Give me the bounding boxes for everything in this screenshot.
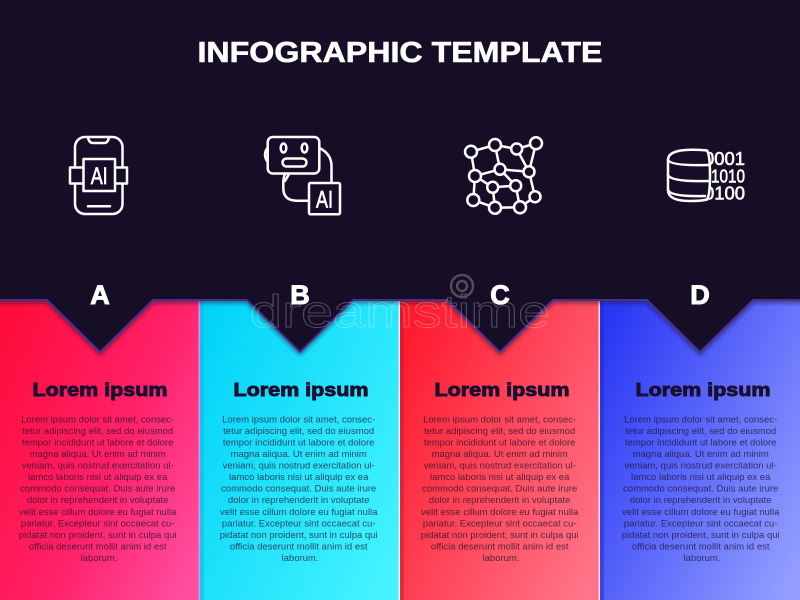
body text A: laborum.: [81, 553, 117, 564]
body text C: tetur adipiscing elit, sed do eiusmod: [424, 426, 575, 437]
icon: neural network: [465, 137, 542, 214]
heading C: Lorem ipsum: [434, 379, 570, 400]
body text C: Lorem ipsum dolor sit amet, consec-: [423, 414, 576, 426]
icon: AI robot: AI: [316, 186, 333, 214]
body text A: lamco laboris nisi ut aliquip ex ea: [28, 472, 168, 483]
body text D: dolor in reprehenderit in voluptate: [630, 495, 771, 506]
heading B: Lorem ipsum: [234, 379, 368, 400]
body text B: tempor incididunt ut labore et dolore: [223, 438, 374, 448]
body text B: Lorem ipsum dolor sit amet, consec-: [222, 414, 375, 426]
body text A: tetur adipiscing elit, sed do eiusmod: [22, 426, 173, 437]
icon: database with binary code: 0001: [704, 149, 745, 169]
body text C: magna aliqua. Ut enim ad minim: [432, 449, 568, 460]
icon: database with binary code: 1010: [711, 166, 745, 186]
body text B: velit esse cillum dolore eu fugiat nulla: [220, 507, 378, 518]
body text D: magna aliqua. Ut enim ad minim: [633, 449, 769, 460]
icon: database with binary code: [668, 149, 745, 204]
watermark: dreamstime: [250, 286, 550, 337]
body text D: officia deserunt mollit anim id est: [632, 541, 770, 552]
body text A: Lorem ipsum dolor sit amet, consec-: [21, 414, 174, 426]
body text D: veniam, quis nostrud exercitation ul-: [625, 461, 777, 472]
title: INFOGRAPHIC TEMPLATE: [198, 37, 602, 69]
body text D: tetur adipiscing elit, sed do eiusmod: [625, 426, 776, 437]
body text C: pariatur. Excepteur sint occaecat cu-: [423, 518, 577, 529]
panel C: [400, 300, 600, 600]
body text A: pidatat non proident, sunt in culpa qui: [19, 530, 177, 541]
body text C: commodo consequat. Duis aute irure: [422, 484, 577, 495]
letter A: A: [90, 280, 110, 310]
body text B: officia deserunt mollit anim id est: [230, 541, 368, 552]
body text A: officia deserunt mollit anim id est: [29, 541, 167, 552]
body text D: Lorem ipsum dolor sit amet, consec-: [624, 414, 777, 426]
body text B: laborum.: [282, 553, 318, 564]
body text C: officia deserunt mollit anim id est: [431, 541, 569, 552]
panel A: [0, 300, 200, 600]
icon: AI robot: [265, 137, 340, 214]
body text B: pidatat non proident, sunt in culpa qui: [220, 530, 378, 541]
body text D: pidatat non proident, sunt in culpa qui: [622, 530, 780, 541]
letter D: D: [690, 280, 710, 310]
icon: AI smartphone: [70, 137, 127, 214]
body text A: pariatur. Excepteur sint occaecat cu-: [21, 518, 175, 529]
body text C: veniam, quis nostrud exercitation ul-: [424, 461, 576, 472]
body text C: lamco laboris nisi ut aliquip ex ea: [430, 472, 570, 483]
body text C: dolor in reprehenderit in voluptate: [429, 495, 570, 506]
body text C: tempor incididunt ut labore et dolore: [424, 438, 575, 448]
body text D: lamco laboris nisi ut aliquip ex ea: [631, 472, 771, 483]
body text B: dolor in reprehenderit in voluptate: [228, 495, 369, 506]
body text B: pariatur. Excepteur sint occaecat cu-: [222, 518, 376, 529]
body text C: laborum.: [483, 553, 519, 564]
icon: database with binary code: 0100: [704, 184, 745, 204]
body text A: commodo consequat. Duis aute irure: [20, 484, 175, 495]
icon: AI smartphone: AI: [91, 163, 108, 190]
body text C: pidatat non proident, sunt in culpa qui: [421, 530, 579, 541]
body text B: lamco laboris nisi ut aliquip ex ea: [229, 472, 369, 483]
body text A: magna aliqua. Ut enim ad minim: [30, 449, 166, 460]
body text D: laborum.: [684, 553, 720, 564]
body text D: commodo consequat. Duis aute irure: [623, 484, 778, 495]
panel B: [200, 300, 400, 600]
body text B: magna aliqua. Ut enim ad minim: [231, 449, 367, 460]
body text A: tempor incididunt ut labore et dolore: [22, 438, 173, 448]
heading A: Lorem ipsum: [32, 379, 168, 400]
letter C: C: [490, 280, 510, 310]
body text D: pariatur. Excepteur sint occaecat cu-: [624, 518, 778, 529]
body text A: velit esse cillum dolore eu fugiat nulla: [19, 507, 177, 518]
body text B: commodo consequat. Duis aute irure: [221, 484, 376, 495]
body text A: veniam, quis nostrud exercitation ul-: [22, 461, 174, 472]
body text D: tempor incididunt ut labore et dolore: [625, 438, 776, 448]
body text C: velit esse cillum dolore eu fugiat nulla: [421, 507, 579, 518]
body text A: dolor in reprehenderit in voluptate: [27, 495, 168, 506]
letter B: B: [290, 280, 310, 310]
watermark: [250, 275, 550, 337]
body text B: tetur adipiscing elit, sed do eiusmod: [223, 426, 374, 437]
panel D: [600, 300, 800, 600]
notched header band: [0, 0, 800, 352]
body text D: velit esse cillum dolore eu fugiat nulla: [622, 507, 780, 518]
heading D: Lorem ipsum: [636, 379, 770, 400]
body text B: veniam, quis nostrud exercitation ul-: [223, 461, 375, 472]
